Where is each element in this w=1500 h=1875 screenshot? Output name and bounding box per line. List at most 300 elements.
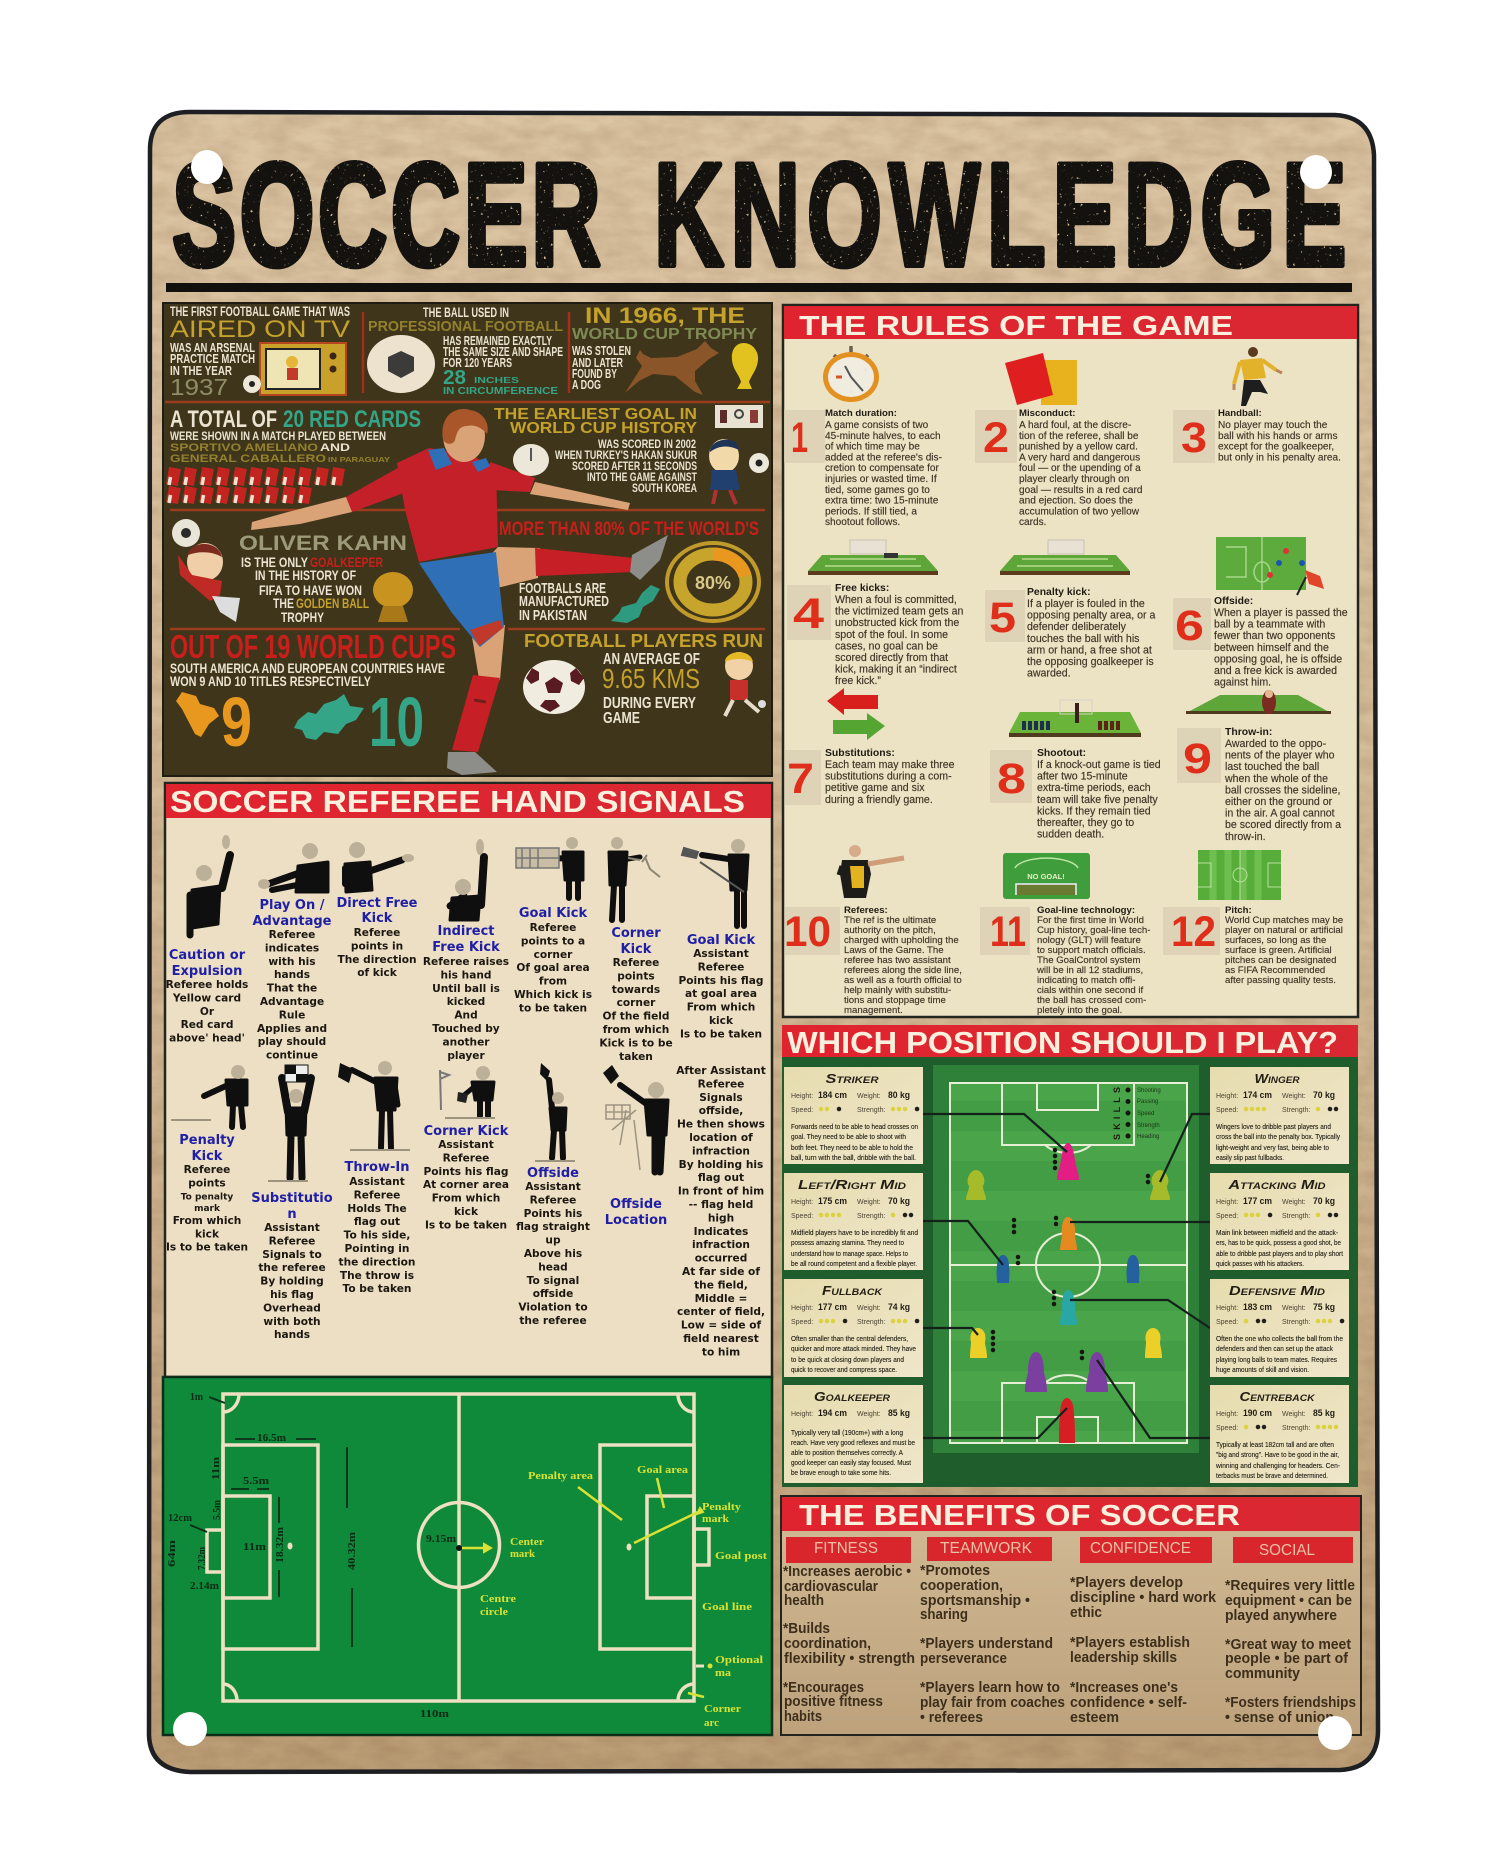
rule 9: throw-in: Throw-in: — [1225, 727, 1272, 738]
signal: throw-in: To his side, — [344, 1230, 410, 1242]
heading: rules of the game: THE RULES OF THE GAME — [799, 310, 1233, 341]
column: confidence: leadership skills — [1070, 1650, 1177, 1666]
rule 2: misconduct: cards. — [1019, 517, 1046, 528]
signal: substitution: hands — [274, 1329, 310, 1341]
icon: handball player — [1234, 347, 1282, 406]
signal: caution or expulsion — [166, 948, 248, 1045]
fact: Oliver Kahn: IN THE HISTORY OF — [255, 567, 356, 583]
rule 4: free kicks: 4 — [793, 590, 824, 638]
column: fitness: *Builds — [783, 1621, 830, 1637]
icon: offside field — [1216, 537, 1324, 595]
column: fitness: coordination, — [784, 1636, 871, 1652]
card: striker — [784, 1067, 923, 1164]
card: fullback: Often smaller than the central defenders, — [791, 1334, 908, 1343]
rule 5: penalty kick — [989, 587, 1156, 680]
referee figures: top row — [190, 835, 748, 935]
panel: field dimensions — [163, 1377, 772, 1735]
icon: substitution arrows — [827, 688, 885, 740]
signal: offside location text: infraction — [692, 1145, 750, 1157]
rule 3: handball: No player may touch the — [1218, 420, 1328, 431]
rule 12: pitch: Pitch: — [1225, 905, 1252, 916]
rule 2: misconduct: goal — results in a red card — [1019, 485, 1142, 496]
panel: football facts — [163, 303, 772, 776]
signal: substitution: his flag — [270, 1289, 314, 1301]
card: goalkeeper: Weight: — [857, 1411, 881, 1418]
column: fitness: cardiovascular — [784, 1579, 878, 1595]
card: goalkeeper: 85 kg — [888, 1408, 910, 1418]
card: fullback: Fullback — [822, 1283, 884, 1298]
rule 8: shootout: extra-time periods, each — [1037, 782, 1151, 794]
fact: red cards: IN PARAGUAY — [328, 455, 390, 464]
rule 9: throw-in: in the air. A goal cannot — [1225, 808, 1335, 820]
column: fitness: *Encourages — [783, 1680, 864, 1696]
rule 2: misconduct: 2 — [983, 414, 1009, 462]
signal: play on / advantage: continue — [266, 1050, 318, 1062]
illustration: kicking player — [251, 409, 668, 775]
card: winger: 70 kg — [1313, 1090, 1335, 1100]
signal: indirect free kick: And — [454, 1010, 478, 1022]
signal: direct free kick: Direct Free — [336, 896, 418, 911]
signal: penalty kick: Is to be taken — [166, 1242, 248, 1254]
rule 7: substitutions — [787, 748, 955, 806]
panel: benefits of soccer — [781, 1496, 1361, 1735]
icon: pitch — [1198, 850, 1281, 900]
rule 4: free kicks: cases, no goal can be — [835, 640, 938, 652]
column: social: community — [1225, 1666, 1300, 1682]
card: defensive mid: Strength: — [1282, 1319, 1310, 1326]
rule 12: pitch: 12 — [1171, 908, 1216, 956]
card: fullback: 177 cm — [818, 1302, 847, 1312]
card: left/right mid: possess amazing stamina. They need to — [791, 1238, 904, 1247]
signal: caution or expulsion: Referee holds — [166, 979, 248, 991]
card: centreback: Weight: — [1282, 1411, 1306, 1418]
column: fitness: positive fitness — [784, 1694, 883, 1710]
rule 6: offside: ball by a teammate with — [1214, 619, 1325, 631]
fact: Oliver Kahn: IS THE ONLY — [241, 554, 309, 570]
card: winger: Wingers love to dribble past players and — [1216, 1122, 1331, 1131]
column: teamwork: perseverance — [920, 1651, 1007, 1667]
rule 8: shootout: sudden death. — [1037, 829, 1104, 841]
signal: goal kick (referee): Goal Kick — [519, 906, 587, 921]
signal: goal kick (referee): Of goal area — [516, 962, 590, 974]
dimension labels: 9.15m — [426, 1534, 456, 1545]
signal: goal kick (referee) — [514, 906, 592, 1014]
heading: which position: WHICH POSITION SHOULD I PLAY? — [787, 1025, 1338, 1060]
rule 12: pitch: World Cup matches may be — [1225, 915, 1343, 926]
fact: aired on TV: 1937 — [170, 374, 228, 400]
card: defensive mid: Weight: — [1282, 1305, 1306, 1312]
signal: corner kick (referee): Kick is to be — [599, 1037, 673, 1049]
fact: players run: DURING EVERY — [603, 695, 696, 712]
fact: out of 19 World Cups: OUT OF 19 WORLD CUPS — [170, 628, 456, 665]
rule 2: misconduct: A very hard and dangerous — [1019, 452, 1140, 463]
rule 2: misconduct: accumulation of two yellow — [1019, 506, 1140, 517]
card: attacking mid: Speed: — [1216, 1213, 1238, 1220]
card: goalkeeper: be brave enough to take some hits. — [791, 1468, 891, 1477]
rule 4: free kicks: kick, making it an “indirect — [835, 664, 957, 676]
rule 5: penalty kick: 5 — [989, 594, 1016, 642]
dimension labels: 11m — [211, 1457, 222, 1480]
signal: penalty kick: kick — [195, 1228, 220, 1240]
card: fullback: Height: — [791, 1305, 813, 1312]
signal: play on / advantage: Advantage — [260, 996, 324, 1008]
card: goalkeeper: Goalkeeper — [814, 1389, 891, 1404]
fact: 80 percent: MANUFACTURED — [519, 593, 609, 610]
rule 10: referees: 10 — [784, 908, 831, 956]
fact: stolen trophy: FOUND BY — [572, 367, 617, 381]
card: winger: Winger — [1254, 1071, 1300, 1086]
rule 1: match duration: shootout follows. — [825, 517, 900, 528]
rule 10: referees: tions and stoppage time — [844, 995, 946, 1006]
card: left/right mid: Weight: — [857, 1199, 881, 1206]
column: social: *Fosters friendships — [1225, 1695, 1356, 1711]
rule 8: shootout: after two 15-minute — [1037, 771, 1128, 783]
signal: corner kick (referee): from which — [603, 1024, 669, 1036]
rule 1: match duration: periods. If still tied, a — [825, 506, 917, 517]
rule 8: shootout: team will take five penalty — [1037, 794, 1158, 806]
fact: professional football ball: FOR 120 YEARS — [443, 356, 512, 370]
fact: out of 19 World Cups: 10 — [369, 683, 424, 761]
heading: benefits: THE BENEFITS OF SOCCER — [799, 1500, 1240, 1532]
card: defensive mid: Defensive Mid — [1229, 1283, 1326, 1298]
signal: offside location text: At far side of — [682, 1266, 760, 1278]
signal: direct free kick — [336, 896, 418, 979]
card: striker: Speed: — [791, 1107, 813, 1114]
card: fullback: quick to recover and compress space. — [791, 1365, 897, 1374]
rule 9: throw-in: either on the ground or — [1225, 796, 1333, 808]
signal: throw-in: Holds The — [347, 1203, 407, 1215]
rule 12: pitch: player on natural or artificial — [1225, 925, 1343, 936]
panel: referee hand signals — [165, 783, 772, 1377]
icon: referee — [839, 845, 904, 898]
column: teamwork: • referees — [920, 1710, 983, 1726]
signal: offside location text: center of field, — [677, 1306, 765, 1318]
signal: play on / advantage: That the — [267, 983, 317, 995]
signal: corner kick (assistant) — [423, 1124, 509, 1231]
rule 1: match duration: 45-minute halves, to each — [825, 431, 941, 442]
signal: indirect free kick: Indirect — [437, 924, 495, 939]
signal: play on / advantage: indicates — [265, 942, 319, 954]
signal: offside location text: the field, — [694, 1279, 748, 1291]
icon: no goal — [1003, 853, 1090, 899]
signal: goal kick (referee): Referee — [530, 922, 576, 934]
signal: corner kick (referee): Referee — [613, 957, 659, 969]
signal: play on / advantage: Applies and — [257, 1023, 327, 1035]
rule 12: pitch — [1171, 905, 1343, 986]
rule 9: throw-in: nents of the player who — [1225, 750, 1335, 762]
skills legend: SKILLS — [1112, 1087, 1122, 1140]
field callouts: Centre — [480, 1593, 516, 1605]
signal: corner kick (assistant): Is to be taken — [425, 1219, 507, 1231]
rule 6: offside — [1175, 596, 1348, 689]
signal: goal kick (assistant): Assistant — [693, 948, 749, 960]
rule 12: pitch: as FIFA Recommended — [1225, 965, 1325, 976]
rule 6: offside: When a player is passed the — [1214, 607, 1348, 619]
rule 5: penalty kick: awarded. — [1027, 668, 1071, 680]
field callouts: arc — [704, 1717, 719, 1729]
signal: play on / advantage: Rule — [279, 1009, 305, 1021]
card: attacking mid: Strength: — [1282, 1213, 1310, 1220]
signal: corner kick (assistant): Points his flag — [423, 1166, 509, 1178]
fact: earliest goal — [494, 405, 769, 504]
fact: stolen trophy: IN 1966, THE — [585, 303, 745, 328]
fact: 80 percent: 80% — [695, 573, 731, 593]
signal: substitution: Signals to — [262, 1249, 322, 1261]
rule 1: match duration: tied, some games go to — [825, 485, 930, 496]
card: left/right mid: Midfield players have to be incredibly fit and — [791, 1228, 918, 1237]
card: left/right mid — [784, 1173, 923, 1270]
signal: indirect free kick: kicked — [447, 996, 485, 1008]
rule 9: throw-in: ball crosses the sideline, — [1225, 784, 1340, 796]
rule 2: misconduct: punished by a yellow card. — [1019, 442, 1138, 453]
dimension labels: 110m — [420, 1709, 449, 1720]
signal: offside location text: Indicates — [694, 1226, 748, 1238]
fact: players run — [523, 631, 766, 727]
fact: stolen trophy: WORLD CUP TROPHY — [572, 326, 757, 343]
card: striker: 80 kg — [888, 1090, 910, 1100]
signal: offside: Referee — [530, 1194, 576, 1206]
signal: caution or expulsion: Red card — [181, 1019, 233, 1031]
signal: corner kick (assistant): At corner area — [423, 1179, 509, 1191]
signal: corner kick (referee): taken — [619, 1051, 653, 1063]
signal: caution or expulsion: above' head' — [169, 1033, 245, 1045]
mounting holes — [173, 150, 1352, 1750]
rule 9: throw-in: be scored directly from a — [1225, 819, 1341, 831]
fact: out of 19 World Cups — [170, 628, 456, 761]
signal: goal kick (referee): corner — [534, 949, 573, 961]
signal: throw-in: flag out — [354, 1216, 400, 1228]
card: centreback: Speed: — [1216, 1425, 1238, 1432]
signal: offside location heading: Location — [605, 1213, 667, 1228]
signal: offside location text: In front of him — [678, 1186, 764, 1198]
signal: offside: the referee — [519, 1315, 587, 1327]
column: confidence: confidence • self- — [1070, 1695, 1187, 1711]
fact: aired on TV: IN THE YEAR — [170, 363, 232, 378]
card: striker: ball, turn with the ball, dribble with the ball. — [791, 1153, 916, 1162]
field callouts — [462, 1464, 767, 1729]
rule 11: goal-line technology: to support match officials. — [1037, 945, 1146, 956]
rule 4: free kicks: unobstructed kick from the — [835, 617, 959, 629]
column: social: *Requires very little — [1225, 1578, 1355, 1594]
dimension labels: 64m — [167, 1540, 178, 1567]
signal: substitution: with both — [263, 1316, 321, 1328]
dimension labels: 40.32m — [347, 1532, 358, 1570]
signal: throw-in: To be taken — [343, 1283, 411, 1295]
fact: aired on TV: PRACTICE MATCH — [170, 351, 255, 366]
signal: goal kick (referee): Which kick is — [514, 989, 592, 1001]
signal: offside location text: occurred — [695, 1253, 747, 1265]
fact: aired on TV: WAS AN ARSENAL — [170, 340, 255, 355]
fact: red cards: WERE SHOWN IN A MATCH PLAYED BETWEEN — [170, 429, 386, 443]
skills legend — [993, 1087, 1161, 1364]
dimension labels: 11m — [243, 1542, 266, 1553]
signal: offside: Above his — [524, 1248, 582, 1260]
card: goalkeeper: Typically very tall (190cm+) with a long — [791, 1428, 903, 1437]
signal: penalty kick: Referee — [184, 1164, 230, 1176]
rule 11: goal-line technology: cials within one second if — [1037, 985, 1143, 996]
signal: goal kick (assistant): Goal Kick — [687, 933, 755, 948]
field marks — [288, 1542, 704, 1666]
card: attacking mid: 70 kg — [1313, 1196, 1335, 1206]
rule 1: match duration — [791, 408, 942, 528]
card: winger: 174 cm — [1243, 1090, 1272, 1100]
signal: penalty kick: mark — [194, 1204, 221, 1214]
rule 5: penalty kick: arm or hand, a free shot at — [1027, 644, 1152, 656]
rule 6: offside: against him. — [1214, 677, 1271, 689]
column: fitness: *Increases aerobic • — [783, 1564, 911, 1580]
fact: players run: GAME — [603, 710, 640, 727]
column: social: SOCIAL — [1259, 1542, 1315, 1559]
column: fitness: FITNESS — [814, 1540, 878, 1557]
signal: offside: Assistant — [525, 1181, 581, 1193]
rule 1: match duration: of which time may be — [825, 442, 920, 453]
card: left/right mid: Speed: — [791, 1213, 813, 1220]
card: left/right mid: 70 kg — [888, 1196, 910, 1206]
panel: which position should I play — [782, 1025, 1358, 1487]
rule 4: free kicks — [793, 583, 963, 687]
card: attacking mid — [1210, 1173, 1349, 1270]
signal: indirect free kick: another — [443, 1036, 490, 1048]
dimension labels: 7.32m — [197, 1547, 208, 1570]
rule 8: shootout: Shootout: — [1037, 748, 1086, 759]
heading: referee hand signals: SOCCER REFEREE HAND SIGNALS — [170, 784, 745, 819]
signal: indirect free kick: Free Kick — [432, 940, 500, 955]
rule 10: referees: authority on the pitch, — [844, 925, 936, 936]
rule 4: free kicks: the victimized team gets an — [835, 606, 963, 618]
signal: offside: Offside — [527, 1166, 579, 1181]
column: confidence: esteem — [1070, 1710, 1119, 1726]
signal: offside location text: offside, — [699, 1105, 743, 1117]
signal: offside location text: Referee — [698, 1078, 744, 1090]
signal: offside — [516, 1166, 590, 1327]
rule 1: match duration: Match duration: — [825, 408, 897, 419]
card: fullback: Strength: — [857, 1319, 885, 1326]
rule 10: referees: Laws of the Game. The — [844, 945, 944, 956]
rule 6: offside: Offside: — [1214, 596, 1253, 607]
signal: indirect free kick: player — [447, 1050, 485, 1062]
signal: play on / advantage — [253, 898, 332, 1062]
column: confidence: ethic — [1070, 1605, 1102, 1621]
signal: corner kick (assistant): Corner Kick — [424, 1124, 509, 1139]
rule 12: pitch: after passing quality tests. — [1225, 975, 1336, 986]
rule 8: shootout — [997, 748, 1161, 841]
fact: professional football ball: IN CIRCUMFERENCE — [443, 385, 558, 397]
fact: professional football ball: INCHES — [474, 375, 519, 385]
signal: throw-in: Throw-In — [345, 1160, 409, 1175]
column: teamwork: play fair from coaches — [920, 1695, 1065, 1711]
column: teamwork: cooperation, — [920, 1578, 1003, 1594]
title: KNOWLEDGE — [654, 134, 1353, 297]
fact: red cards: GENERAL CABALLERO — [170, 453, 327, 465]
rule 11: goal-line technology: 11 — [990, 908, 1026, 956]
rule 4: free kicks: When a foul is committed, — [835, 594, 957, 606]
field callouts: Goal line — [702, 1601, 752, 1613]
skills legend: Speed — [1137, 1111, 1154, 1117]
field callouts: Corner — [704, 1703, 741, 1715]
signal: penalty kick: Kick — [192, 1149, 223, 1164]
icon: penalty kick field — [1000, 540, 1130, 575]
signal: offside location text: field nearest — [683, 1333, 759, 1345]
rule 10: referees: as well as a fourth official to — [844, 975, 962, 986]
column: social: equipment • can be — [1225, 1593, 1352, 1609]
rule 10: referees: charged with upholding the — [844, 935, 959, 946]
card: centreback: Typically at least 182cm tall and are often — [1216, 1440, 1334, 1449]
card: left/right mid: 175 cm — [818, 1196, 847, 1206]
fact: out of 19 World Cups: SOUTH AMERICA AND EUROPEAN COUNTRIES HAVE — [170, 660, 445, 676]
rule 7: substitutions: Each team may make three — [825, 759, 955, 771]
signal: direct free kick: points in — [351, 940, 403, 952]
rule 11: goal-line technology: Goal-line technology: — [1037, 905, 1135, 916]
skills legend: Strength — [1137, 1123, 1160, 1129]
field callouts: ma — [715, 1667, 732, 1679]
fact: out of 19 World Cups: 9 — [221, 683, 252, 761]
fact: red cards: 20 RED CARDS — [283, 406, 421, 433]
signal: play on / advantage: Advantage — [253, 914, 332, 929]
column: fitness: flexibility • strength — [784, 1651, 915, 1667]
signal: goal kick (referee): points to a — [521, 935, 585, 947]
signal: indirect free kick: Referee raises — [423, 956, 509, 968]
card: winger: cross the ball into the penalty box. Typically — [1216, 1132, 1340, 1141]
rule 1: match duration: extra time: two 15-minute — [825, 496, 939, 507]
rule 2: misconduct: A hard foul, at the discre- — [1019, 420, 1131, 431]
card: winger: Speed: — [1216, 1107, 1238, 1114]
dimension labels: 16.5m — [257, 1433, 286, 1444]
card: centreback: Centreback — [1240, 1389, 1316, 1404]
card: centreback: winning and challenging for headers. Cen- — [1215, 1461, 1341, 1470]
card: attacking mid: Main link between midfield and the attack- — [1216, 1228, 1339, 1237]
icon: shootout field — [1009, 700, 1141, 737]
column: fitness: habits — [784, 1709, 822, 1725]
skills legend: Passing — [1137, 1099, 1158, 1105]
rule 1: match duration: added at the referee's dis- — [825, 452, 942, 463]
card: defensive mid: 183 cm — [1243, 1302, 1272, 1312]
skills legend: Heading — [1137, 1134, 1159, 1140]
rule 10: referees: referees along the side line, — [844, 965, 962, 976]
field callouts: Optional — [715, 1654, 763, 1666]
fact: professional football ball: PROFESSIONAL FOOTBALL — [368, 318, 563, 335]
column: fitness: health — [784, 1593, 824, 1609]
signal: corner kick (referee): Kick — [621, 942, 652, 957]
rule 11: goal-line technology: the ball has crossed com- — [1037, 995, 1146, 1006]
field callouts: mark — [510, 1548, 536, 1560]
rule 7: substitutions: during a friendly game. — [825, 794, 933, 806]
fact: 80 percent: MORE THAN 80% OF THE WORLD'S — [499, 519, 759, 540]
field callouts: Center — [510, 1536, 544, 1548]
card: goalkeeper: 194 cm — [818, 1408, 847, 1418]
rule 1: match duration: 1 — [791, 414, 808, 462]
rule 12: pitch: surface is green. Artificial — [1225, 945, 1332, 956]
card: centreback: Strength: — [1282, 1425, 1310, 1432]
card: striker: 184 cm — [818, 1090, 847, 1100]
signal: offside: offside — [533, 1288, 573, 1300]
signal: corner kick (referee) — [599, 926, 673, 1063]
card: attacking mid: quick passes with his attackers. — [1216, 1259, 1304, 1268]
card: striker: both feet. They need to be able to hold the — [791, 1143, 913, 1152]
number backing boxes — [784, 410, 1221, 955]
fact: aired on TV — [170, 303, 350, 400]
signal: substitution: n — [287, 1207, 297, 1222]
card: attacking mid: able to dribble past players and to play short — [1216, 1249, 1343, 1258]
rule 2: misconduct: Misconduct: — [1019, 408, 1076, 419]
field markings — [207, 1394, 709, 1701]
signal: goal kick (assistant): kick — [709, 1015, 734, 1027]
signal: indirect free kick — [423, 924, 509, 1062]
card: fullback: Weight: — [857, 1305, 881, 1312]
signal: penalty kick: To penalty — [181, 1192, 233, 1202]
rule 10: referees — [784, 905, 962, 1016]
signal: goal kick (assistant): From which — [687, 1002, 755, 1014]
fact: red cards: A TOTAL OF — [170, 406, 277, 433]
